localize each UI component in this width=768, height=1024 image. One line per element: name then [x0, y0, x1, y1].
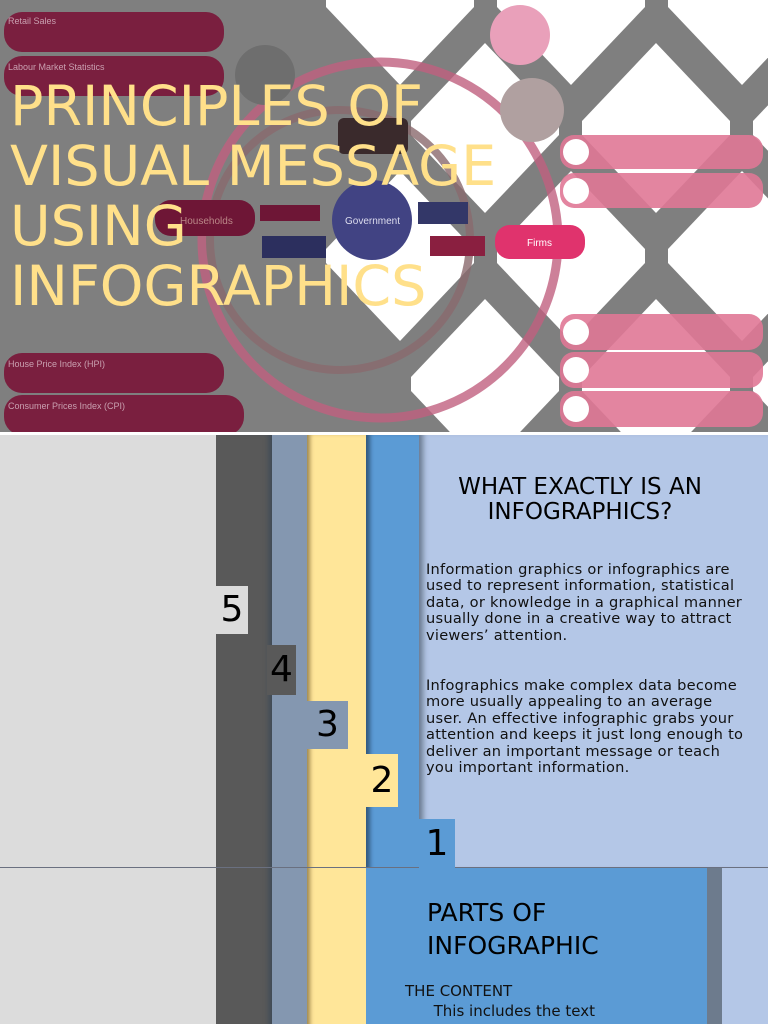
text block: definition: data, or knowledge in a graphical manner [426, 594, 742, 611]
text block: definition: usually done in a creative way to attract [426, 610, 731, 627]
heading: parts: INFOGRAPHIC [427, 931, 599, 960]
text block: content: This includes the text [434, 1002, 595, 1020]
heading: what exactly: WHAT EXACTLY IS AN [458, 474, 702, 500]
text block: purpose: deliver an important message or teach [426, 743, 720, 760]
text block: purpose: user. An effective infographic grabs your [426, 710, 734, 727]
text block: content: THE CONTENT [405, 982, 512, 1000]
circular flow ring [202, 62, 558, 418]
left info boxes [4, 12, 244, 435]
text block: purpose [426, 677, 743, 776]
number 3 [307, 701, 348, 749]
heading: what exactly: INFOGRAPHICS? [488, 499, 672, 525]
title: INFOGRAPHICS [10, 254, 426, 319]
number 2 [366, 754, 398, 807]
number 5: 5 [221, 589, 243, 630]
number 1 [419, 819, 455, 868]
title: PRINCIPLES OF [10, 74, 423, 139]
text block: purpose: Infographics make complex data become [426, 677, 737, 694]
central diagram: Government [345, 216, 400, 227]
text block: purpose: attention and keeps it just long enough to [426, 726, 743, 743]
number 4: 4 [270, 649, 293, 690]
divider line [0, 867, 768, 868]
light blue lower right [707, 868, 768, 1024]
text block: definition [426, 561, 742, 644]
number 1: 1 [426, 823, 448, 864]
title: VISUAL MESSAGE [10, 134, 496, 199]
stripe 2 blue [366, 435, 419, 1024]
stripe 3 yellow [307, 435, 366, 1024]
left info boxes: House Price Index (HPI) [8, 359, 105, 369]
number 4 [267, 645, 296, 695]
left info boxes: Retail Sales [8, 16, 57, 26]
central diagram: Firms [527, 238, 552, 249]
title: USING [10, 194, 187, 259]
text block: purpose: you important information. [426, 759, 630, 776]
panel: lower slide [0, 432, 768, 1024]
text block: definition: Information graphics or infographics are [426, 561, 730, 578]
heading: what exactly [458, 474, 702, 525]
number 3: 3 [316, 704, 339, 745]
left info boxes: Consumer Prices Index (CPI) [8, 401, 125, 411]
stripe 5 dark [216, 435, 272, 1024]
panel: text box light blue [419, 435, 768, 868]
title [10, 74, 496, 319]
right info boxes [560, 135, 763, 427]
text block: definition: viewers’ attention. [426, 627, 567, 644]
heading: parts: PARTS OF [427, 898, 546, 927]
number 2: 2 [371, 760, 393, 801]
number 5 [216, 586, 248, 634]
central diagram [155, 5, 585, 260]
heading: parts [427, 898, 599, 960]
central diagram: Households [180, 216, 233, 227]
text block: definition: used to represent information, statistical [426, 577, 734, 594]
left info boxes: Labour Market Statistics [8, 62, 105, 72]
text block: content [404, 982, 595, 1020]
panel: header image [0, 0, 768, 432]
text block: purpose: more usually appealing to an average [426, 693, 712, 710]
white lattice cells [326, 0, 768, 469]
panel: parts of infographic [366, 868, 722, 1024]
stripe 4 grey-blue [272, 435, 307, 1024]
